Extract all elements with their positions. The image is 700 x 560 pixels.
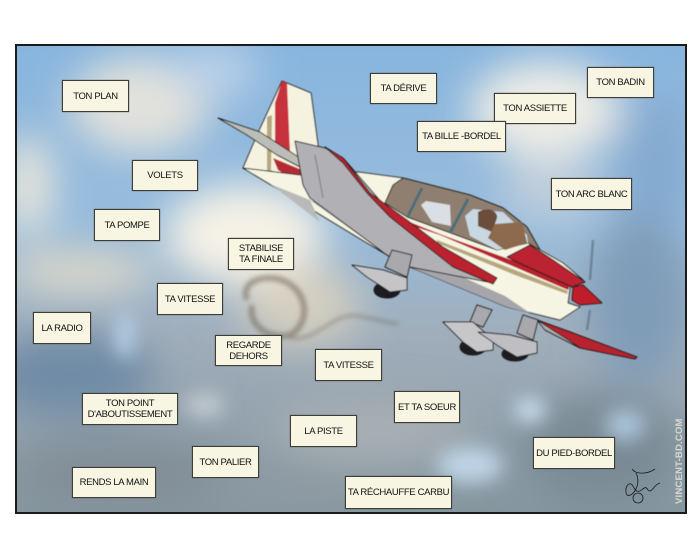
signature xyxy=(626,469,660,503)
label: ta réchauffe carbu xyxy=(345,476,452,509)
label: ta pompe: TA POMPE xyxy=(104,220,150,230)
label: ta bille-bordel xyxy=(417,121,506,152)
smoke trail xyxy=(246,278,398,338)
red cheat line xyxy=(407,221,570,290)
label: la radio: LA RADIO xyxy=(41,322,83,334)
label: ta vitesse: TA VITESSE xyxy=(165,294,215,304)
website credit: VINCENT-BD.COM xyxy=(674,418,685,504)
label: ton arc blanc xyxy=(551,178,632,210)
tailplane xyxy=(218,118,300,167)
label: et ta soeur: ET TA SOEUR xyxy=(398,402,456,412)
label: stabilise ta finale: STABILISE xyxy=(239,243,283,254)
label: ta bille-bordel: TA BILLE -BORDEL xyxy=(422,131,501,142)
label: ton plan xyxy=(62,80,129,112)
spinner xyxy=(572,285,602,305)
label: la piste: LA PISTE xyxy=(304,426,343,436)
label: ton palier xyxy=(192,446,259,478)
label: ton palier: TON PALIER xyxy=(199,456,252,468)
cowling xyxy=(507,245,585,287)
label: la radio xyxy=(33,312,91,344)
label: ta dérive xyxy=(370,73,437,104)
label: ton badin: TON BADIN xyxy=(596,77,645,88)
label: volets: VOLETS xyxy=(147,170,183,181)
label: ton plan: TON PLAN xyxy=(73,90,118,102)
label: et ta soeur xyxy=(394,391,460,423)
far wing xyxy=(537,320,637,359)
underside shade xyxy=(310,200,530,313)
label: ton point d'aboutissement xyxy=(82,393,178,425)
label: stabilise ta finale xyxy=(228,238,294,270)
label: regarde dehors: REGARDE xyxy=(226,340,271,350)
label: rends la main xyxy=(72,467,156,498)
label: ton assiette: TON ASSIETTE xyxy=(503,103,567,114)
left wheel pant xyxy=(352,250,412,298)
right wheel pants xyxy=(443,305,538,361)
near wing xyxy=(295,141,497,284)
label: ta vitesse second xyxy=(315,349,382,381)
label: ta pompe xyxy=(94,209,160,241)
label: ta réchauffe carbu: TA RÉCHAUFFE CARBU xyxy=(348,487,449,498)
label: ton point d'aboutissement: TON POINT xyxy=(106,398,154,409)
label: regarde dehors: DEHORS xyxy=(229,350,268,362)
label: du pied-bordel: DU PIED-BORDEL xyxy=(536,448,612,458)
label: ta dérive: TA DÉRIVE xyxy=(381,83,426,94)
propeller blur xyxy=(587,240,593,330)
label: stabilise ta finale: TA FINALE xyxy=(239,254,283,265)
fuselage xyxy=(243,168,583,320)
label: regarde dehors xyxy=(215,335,282,366)
label: du pied-bordel xyxy=(533,437,615,469)
tail fin xyxy=(243,81,325,205)
canopy xyxy=(385,178,540,250)
label: ton badin xyxy=(587,67,654,98)
label: ta vitesse second: TA VITESSE xyxy=(323,360,374,370)
label: ton assiette xyxy=(494,93,576,124)
label: la piste xyxy=(290,415,357,447)
label: ton point d'aboutissement: D'ABOUTISSEMENT xyxy=(88,409,172,420)
airplane xyxy=(218,81,637,361)
panel border xyxy=(16,45,686,513)
label: ta vitesse xyxy=(157,283,223,315)
label: volets xyxy=(132,160,198,191)
label: ton arc blanc: TON ARC BLANC xyxy=(556,188,627,200)
label: rends la main: RENDS LA MAIN xyxy=(80,477,148,488)
